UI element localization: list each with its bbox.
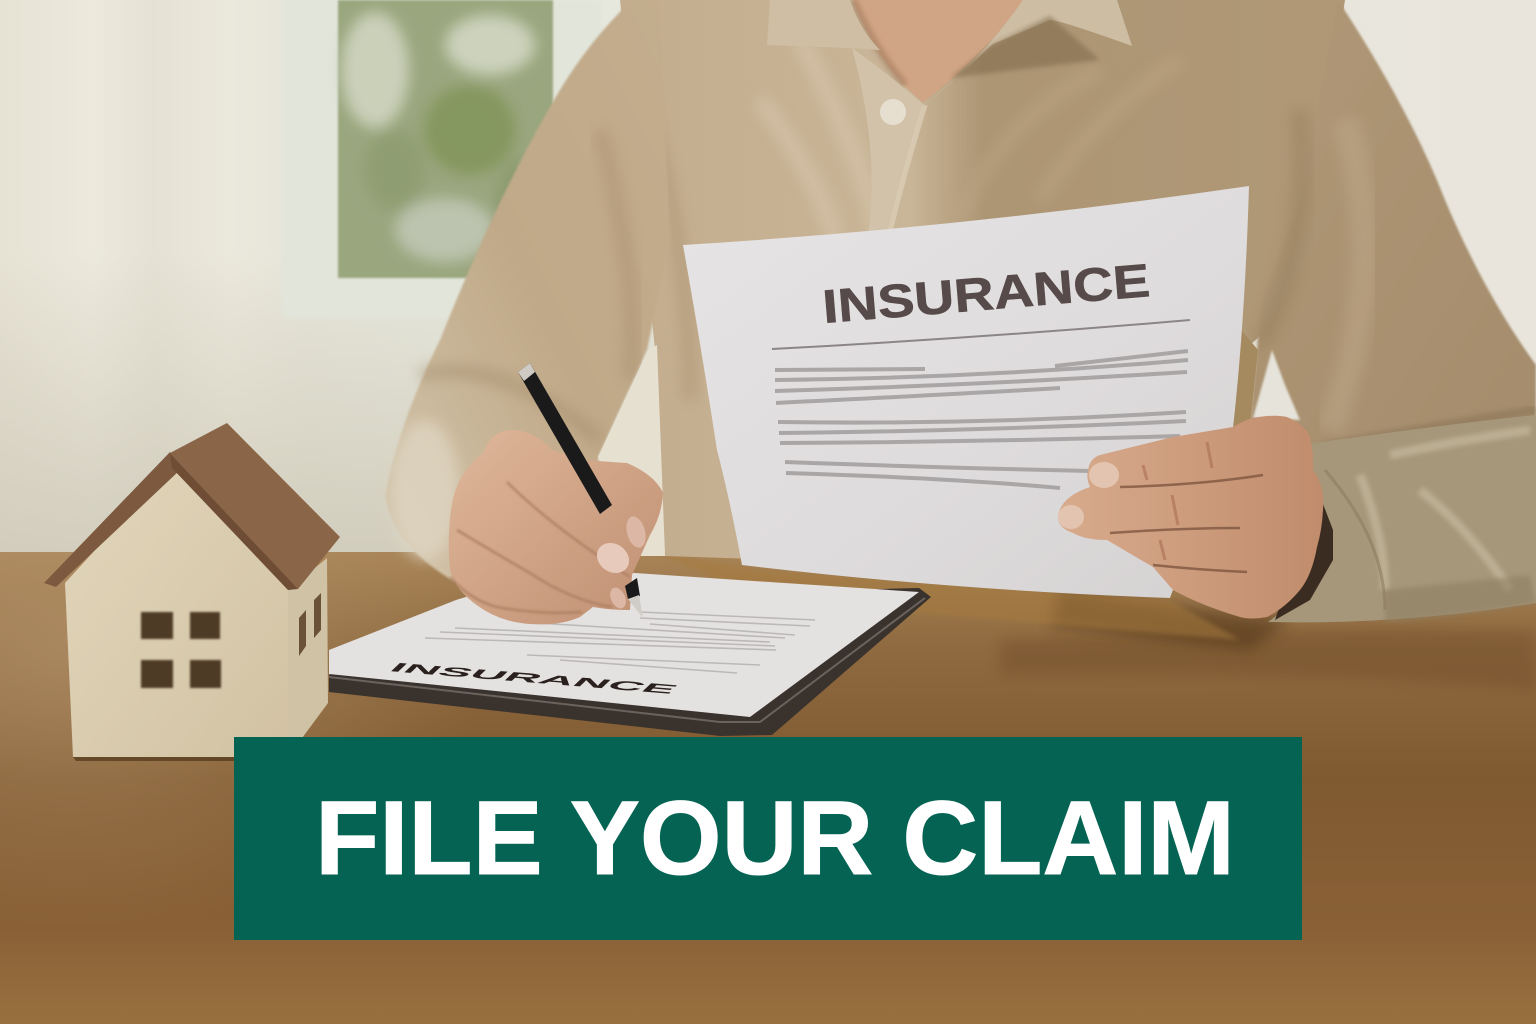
insurance document held up xyxy=(683,186,1249,598)
fingernails xyxy=(1089,462,1119,488)
house front wall xyxy=(65,466,288,757)
left sleeve xyxy=(385,0,670,582)
torso xyxy=(620,0,1345,575)
house roof right slope xyxy=(170,423,340,589)
collar left xyxy=(767,0,880,50)
neck xyxy=(853,0,1024,102)
person in beige shirt xyxy=(385,0,1536,622)
banner: file your claim: FILE YOUR CLAIM xyxy=(315,780,1235,897)
wall gap wedges xyxy=(598,345,665,556)
window with blurred greenery xyxy=(282,0,602,318)
placket xyxy=(852,48,923,236)
house roof left edge xyxy=(44,452,180,587)
house windows xyxy=(141,612,173,639)
placket edge xyxy=(890,105,925,232)
banner: file your claim xyxy=(234,737,1302,940)
collar right xyxy=(925,0,1132,105)
background wall xyxy=(0,0,1536,620)
document body lines xyxy=(775,351,1188,488)
pen body xyxy=(518,363,612,514)
clipboard with form xyxy=(329,568,931,736)
pen tip xyxy=(628,595,643,618)
document title: INSURANCE xyxy=(820,253,1152,333)
forearm cuff xyxy=(1268,415,1536,622)
fingernails xyxy=(591,537,635,579)
holding hand xyxy=(1058,416,1333,620)
house side wall xyxy=(288,558,328,757)
button xyxy=(880,99,906,125)
clipboard label: INSURANCE xyxy=(385,661,682,697)
writing hand with pen xyxy=(449,363,663,624)
table xyxy=(0,552,1536,1024)
house model xyxy=(44,423,340,761)
right sleeve xyxy=(1250,0,1536,450)
